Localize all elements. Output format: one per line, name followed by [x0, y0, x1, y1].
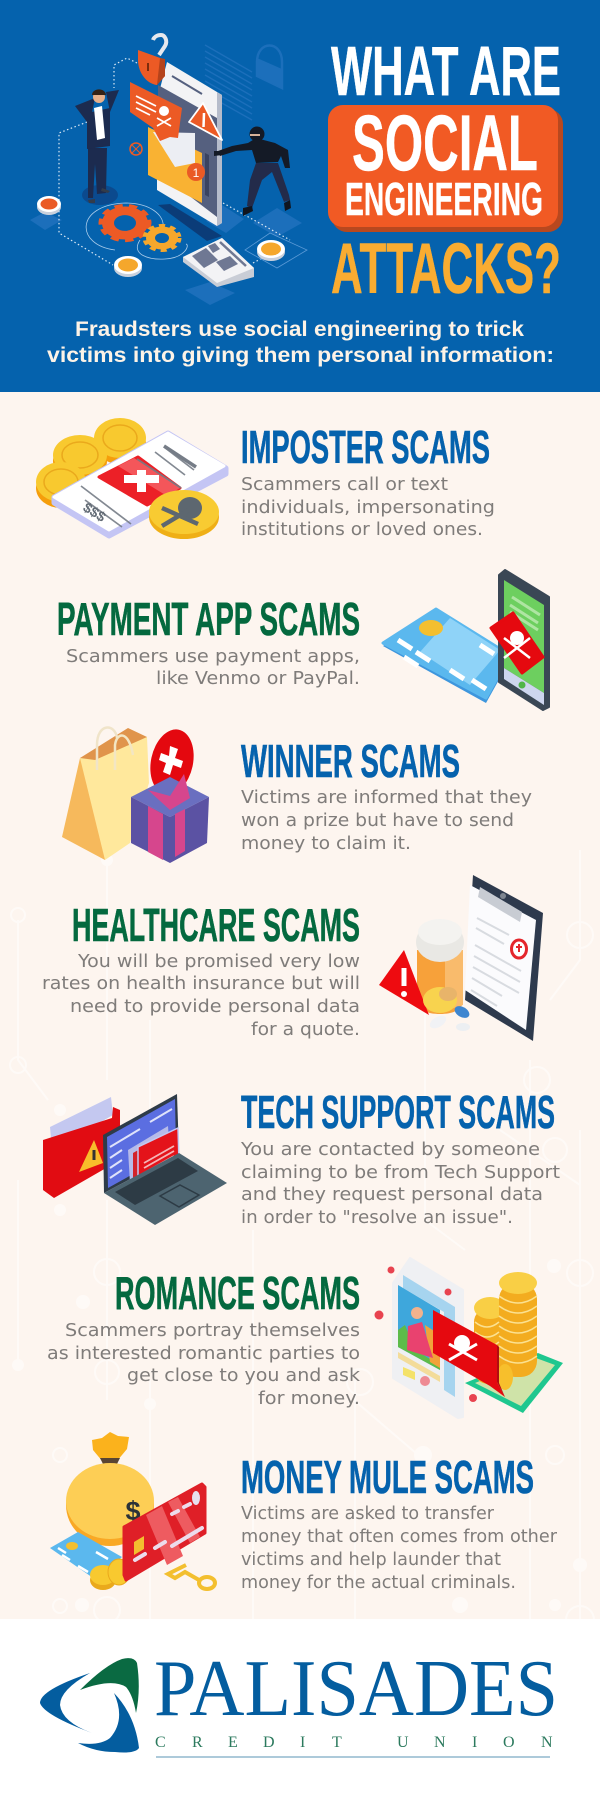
description: institutions or loved ones.	[241, 519, 483, 540]
heading: PAYMENT APP SCAMS	[57, 593, 360, 645]
icon: money bag and credit cards: $	[125, 1496, 141, 1526]
wordmark: credit union: CREDITUNION	[155, 1734, 553, 1751]
description: and they request personal data	[241, 1184, 543, 1205]
description: Victims are asked to transfer	[241, 1503, 495, 1524]
description: for a quote.	[251, 1019, 360, 1040]
description: Scammers use payment apps,	[66, 646, 360, 667]
panel: romance scams	[47, 1258, 563, 1418]
description: as interested romantic parties to	[47, 1343, 360, 1364]
panel: imposter scams	[36, 418, 495, 540]
description: money that often comes from other	[241, 1526, 558, 1547]
description: Scammers call or text	[241, 474, 448, 495]
icon: phone with coins: $$$	[80, 499, 109, 525]
description	[241, 1503, 558, 1593]
heading badge: social engineering	[328, 98, 563, 232]
description: individuals, impersonating	[241, 497, 495, 518]
panel: tech support scams	[43, 1086, 560, 1228]
subtitle	[47, 318, 554, 367]
icon: clipboard, pill bottle and warning	[379, 875, 543, 1041]
heading: WINNER SCAMS	[241, 735, 460, 787]
icon: credit card and phone	[383, 570, 549, 710]
panel: money mule scams	[50, 1432, 558, 1593]
description: get close to you and ask	[127, 1365, 361, 1386]
panel: winner scams	[62, 725, 532, 863]
panel: healthcare scams	[42, 875, 543, 1041]
description	[66, 646, 360, 689]
description: claiming to be from Tech Support	[241, 1162, 560, 1183]
subtitle: Fraudsters use social engineering to trick	[75, 318, 524, 341]
description	[42, 951, 360, 1040]
description: money to claim it.	[241, 833, 411, 854]
illustration: phone hacking scene	[30, 35, 307, 305]
description: victims and help launder that	[241, 1549, 501, 1570]
heading: ROMANCE SCAMS	[115, 1267, 360, 1319]
description: You will be promised very low	[77, 951, 360, 972]
icon: dating phone, coins and skull flag	[374, 1258, 563, 1418]
description	[47, 1320, 361, 1409]
description: need to provide personal data	[70, 996, 360, 1017]
panel: payment app scams	[57, 570, 549, 710]
description: Victims are informed that they	[241, 787, 532, 808]
description: You are contacted by someone	[240, 1139, 540, 1160]
panel: footer logo	[0, 1619, 600, 1800]
description: money for the actual criminals.	[241, 1572, 516, 1593]
description: won a prize but have to send	[241, 810, 514, 831]
icon: shopping bag and gift	[62, 725, 209, 863]
description: Scammers portray themselves	[65, 1320, 360, 1341]
description	[241, 787, 532, 854]
wordmark: palisades: PALISADES	[154, 1645, 558, 1733]
icon: money bag and credit cards	[50, 1432, 215, 1590]
description: for money.	[258, 1388, 360, 1409]
description: rates on health insurance but will	[42, 973, 360, 994]
description: in order to "resolve an issue".	[241, 1207, 513, 1228]
illustration: phone hacking scene: 1	[193, 166, 200, 180]
panel: header	[0, 0, 600, 392]
icon: laptop and folder	[43, 1094, 227, 1225]
heading: HEALTHCARE SCAMS	[72, 899, 360, 951]
description	[240, 1139, 560, 1228]
subtitle: victims into giving them personal information:	[47, 344, 554, 367]
icon: palisades swirl logo	[40, 1658, 139, 1752]
description: like Venmo or PayPal.	[156, 668, 360, 689]
description	[241, 474, 495, 540]
icon: phone with coins	[36, 418, 226, 539]
